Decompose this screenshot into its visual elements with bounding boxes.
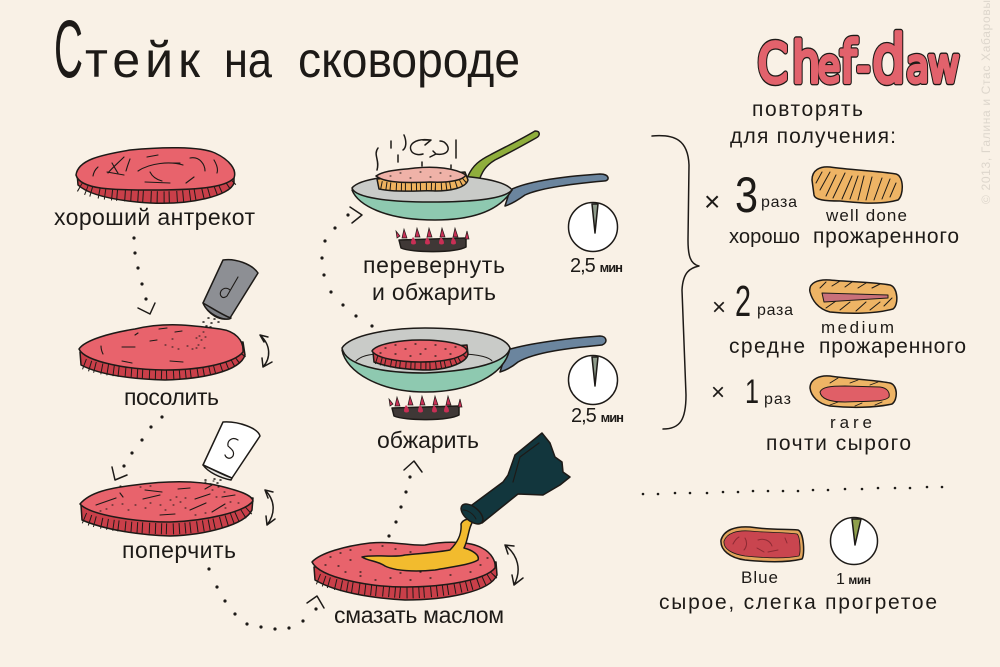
steam and flip arrows (376, 135, 456, 170)
multiplier: 1 (745, 373, 759, 411)
multiplier (704, 167, 797, 223)
english label: rare (830, 413, 872, 432)
logo: Chef-daw: - (857, 39, 870, 93)
russian label: прожаренного (819, 335, 966, 358)
timer (830, 518, 878, 564)
multiplier: 2 (735, 277, 751, 326)
doneness: blue (659, 518, 937, 614)
logo: Chef-daw: - (857, 39, 870, 93)
logo: Chef-daw: f (840, 29, 858, 96)
multiplier: 3 (735, 167, 758, 223)
pan (352, 175, 512, 220)
label: посолить (124, 384, 219, 410)
pan handle (500, 336, 606, 372)
flipped steak (376, 167, 468, 191)
repeat heading: для получения: (730, 125, 896, 148)
burner (389, 396, 462, 420)
logo: Chef-daw (758, 22, 959, 99)
title: тейк (85, 32, 201, 88)
russian label: средне (729, 335, 805, 358)
steak slice (810, 280, 897, 313)
multiplier (712, 277, 793, 326)
steak slice (721, 527, 804, 562)
logo: Chef-daw: e (818, 39, 840, 93)
multiplier (711, 373, 791, 411)
steak (372, 340, 468, 370)
time: 1 мин (836, 571, 871, 588)
label: смазать маслом (334, 602, 504, 628)
repeat heading (730, 98, 896, 148)
logo: Chef-daw: d (872, 22, 906, 99)
rotate arrow (260, 335, 272, 367)
title: С (54, 4, 83, 95)
step: oil (312, 433, 570, 628)
steak (312, 542, 497, 600)
logo: Chef-daw: a (906, 39, 929, 93)
steak (79, 325, 245, 380)
english label: Blue (741, 568, 778, 587)
multiplier: × (711, 379, 725, 406)
logo: Chef-daw: C (758, 32, 788, 95)
spatula (468, 131, 539, 185)
burner (396, 228, 469, 252)
label: обжарить (377, 427, 479, 453)
logo: Chef-daw: d (872, 22, 906, 99)
doneness: rare (711, 373, 911, 455)
step: flip and fry (352, 131, 623, 305)
multiplier: раза (757, 302, 793, 319)
arrow: entrecote to salt (132, 236, 155, 314)
step: salt (79, 260, 272, 410)
title: на (224, 32, 272, 88)
step: fry (342, 328, 624, 453)
english label: well done (825, 206, 907, 225)
doneness: well done (704, 167, 959, 248)
multiplier: раз (764, 391, 791, 408)
repeat heading: повторять (752, 98, 863, 121)
dotted divider (642, 486, 943, 495)
falling pepper (205, 479, 221, 484)
russian label: сырое, слегка прогретое (659, 591, 937, 614)
steak slice (810, 376, 896, 407)
multiplier: × (712, 294, 726, 321)
timer (568, 202, 618, 252)
shaker: grey (203, 260, 258, 319)
logo: Chef-daw: w (928, 39, 959, 94)
multiplier: раза (761, 194, 797, 211)
time: 2,5 мин (570, 255, 623, 277)
logo: Chef-daw: e (818, 39, 840, 93)
logo: Chef-daw: h (792, 30, 820, 95)
label (363, 252, 505, 305)
timer (568, 356, 618, 404)
steak (80, 481, 253, 536)
label: и обжарить (372, 279, 496, 305)
oil puddle (362, 519, 478, 571)
english label: medium (821, 318, 894, 337)
doneness: medium (712, 277, 966, 358)
rotate arrow (265, 490, 275, 525)
arrow: salt to pepper (112, 415, 164, 480)
rotate arrow (505, 545, 523, 585)
russian label: прожаренного (813, 225, 959, 248)
label: поперчить (122, 537, 236, 563)
watermark: © 2013, Галина и Стас Хабаровы (979, 0, 993, 204)
label: хороший антрекот (54, 204, 255, 230)
pan handle (505, 174, 608, 206)
bottle (458, 433, 570, 528)
multiplier: × (704, 186, 720, 217)
russian label: почти сырого (766, 432, 911, 455)
title (54, 4, 520, 95)
steak slice (812, 167, 902, 203)
logo: Chef-daw: f (840, 29, 858, 96)
brace (652, 136, 699, 429)
steak (76, 148, 235, 203)
logo: Chef-daw: C (758, 32, 788, 95)
logo: Chef-daw: w (928, 39, 959, 94)
step: good entrecote (54, 148, 255, 230)
arrow: fry to flip (320, 207, 374, 328)
falling salt (203, 318, 219, 327)
label: перевернуть (363, 252, 505, 278)
logo: Chef-daw: h (792, 30, 820, 95)
arrow: oil to fry (387, 461, 422, 538)
shaker: white (203, 422, 260, 480)
title: сковороде (298, 32, 520, 88)
logo: Chef-daw: a (906, 39, 929, 93)
russian label (729, 335, 966, 358)
arrow: pepper to oil (207, 567, 324, 631)
pan (342, 328, 510, 392)
russian label: хорошо (729, 226, 800, 248)
russian label (729, 225, 959, 248)
time: 2,5 мин (571, 405, 624, 427)
step: pepper (80, 422, 275, 563)
